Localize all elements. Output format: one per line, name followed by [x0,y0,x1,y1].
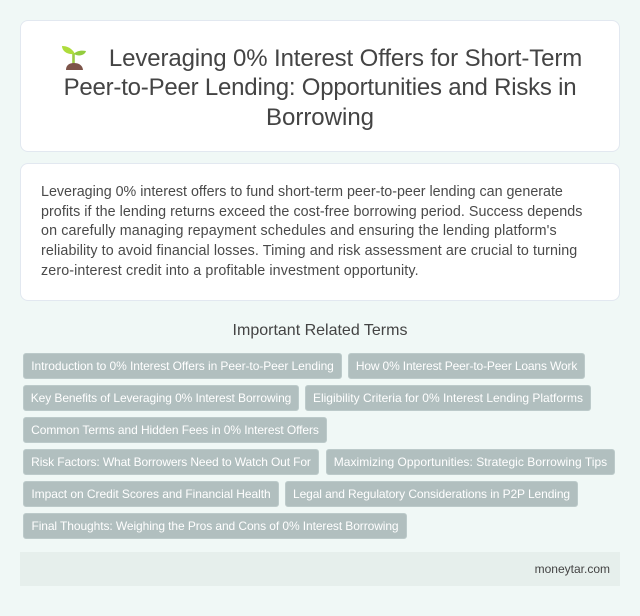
text block: summary [41,184,582,279]
tag [23,417,327,443]
tag: Legal and Regulatory Considerations in P2P Lending [293,487,570,501]
tag: Common Terms and Hidden Fees in 0% Interest Offers [31,423,319,437]
tag: Maximizing Opportunities: Strategic Borrowing Tips [334,455,607,469]
tag [23,353,342,379]
tag [23,513,407,539]
tag [23,481,279,507]
tag [285,481,578,507]
title [64,45,582,131]
title: Borrowing [266,104,374,131]
text block: summary: on carefully managing repayment schedules and ensuring the lending platform's [41,223,557,239]
tag [348,353,585,379]
tag: Risk Factors: What Borrowers Need to Watch Out For [31,455,311,469]
tag: Final Thoughts: Weighing the Pros and Cons of 0% Interest Borrowing [31,519,399,533]
tag: Introduction to 0% Interest Offers in Peer-to-Peer Lending [31,359,334,373]
tag: Key Benefits of Leveraging 0% Interest Borrowing [31,391,291,405]
tag [23,449,319,475]
icon: seedling [62,46,86,70]
footer text: moneytar.com [535,562,610,576]
title: Peer-to-Peer Lending: Opportunities and Risks in [64,74,576,101]
heading: related terms: Important Related Terms [233,322,407,339]
panel: summary card [20,163,620,301]
tag: Impact on Credit Scores and Financial Health [31,487,271,501]
tag: How 0% Interest Peer-to-Peer Loans Work [356,359,577,373]
tag: Eligibility Criteria for 0% Interest Lending Platforms [313,391,583,405]
text block: summary: profits if the lending returns exceed the cost-free borrowing period. Success depends [41,204,582,220]
title: Leveraging 0% Interest Offers for Short-Term [109,45,582,72]
text block: summary: zero-interest credit into a profitable investment opportunity. [41,263,419,279]
tag list [23,353,615,539]
text block: summary: Leveraging 0% interest offers to fund short-term peer-to-peer lending can generate [41,184,563,200]
panel: title card [20,20,620,152]
tag [326,449,615,475]
tag [305,385,591,411]
text block: summary: reliability to avoid financial losses. Timing and risk assessment are crucial to turning [41,243,577,259]
footer bar [20,552,620,586]
tag [23,385,299,411]
